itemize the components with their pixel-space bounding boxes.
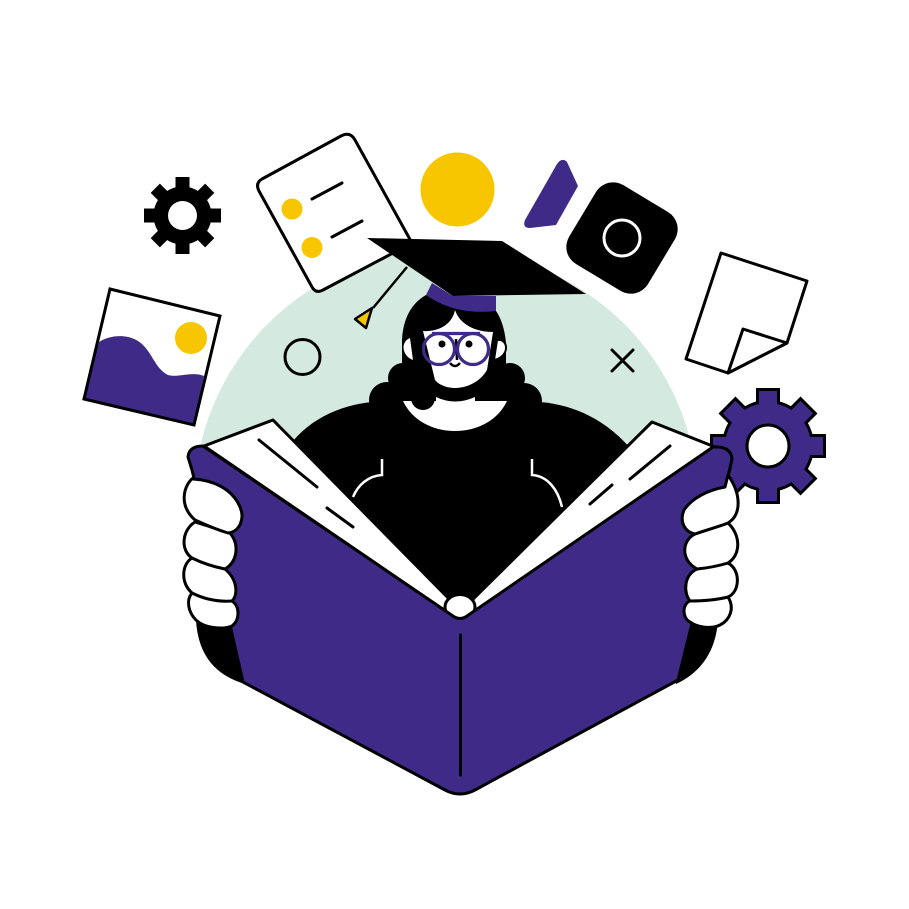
sweater body	[285, 402, 640, 620]
right hand	[682, 475, 738, 627]
front curl	[411, 386, 435, 410]
icon: checklist document	[258, 134, 412, 291]
right page	[462, 422, 715, 612]
open book	[188, 420, 732, 794]
icon: purple gear	[713, 391, 823, 501]
eyes	[438, 340, 472, 348]
left hand	[184, 478, 242, 628]
icon: purple tag shape	[524, 160, 578, 228]
arms behind book	[196, 600, 718, 684]
character: person	[196, 295, 718, 684]
icon: photo card	[84, 289, 220, 425]
icon: yellow circle	[420, 152, 494, 226]
icon: outlined circle	[285, 340, 320, 374]
cap band	[426, 283, 496, 312]
shirt collar	[403, 397, 507, 431]
icon: black rounded square with ring	[559, 175, 685, 301]
ears	[404, 338, 506, 360]
book cover	[188, 446, 732, 794]
cap board	[367, 238, 586, 296]
left page	[204, 420, 460, 612]
graduation cap	[355, 238, 586, 328]
icon: folded paper	[686, 253, 807, 373]
spine knob	[445, 594, 475, 620]
sleeve lines	[353, 459, 562, 507]
face	[423, 310, 493, 388]
tassel	[373, 267, 407, 308]
background green circle	[194, 250, 698, 754]
hair back and curls	[369, 295, 542, 419]
glasses	[424, 334, 488, 364]
page text lines	[259, 440, 670, 527]
spine line	[459, 635, 462, 775]
icon: cross mark	[612, 350, 633, 371]
icon: black gear	[144, 177, 221, 254]
nose and smile	[450, 339, 460, 366]
